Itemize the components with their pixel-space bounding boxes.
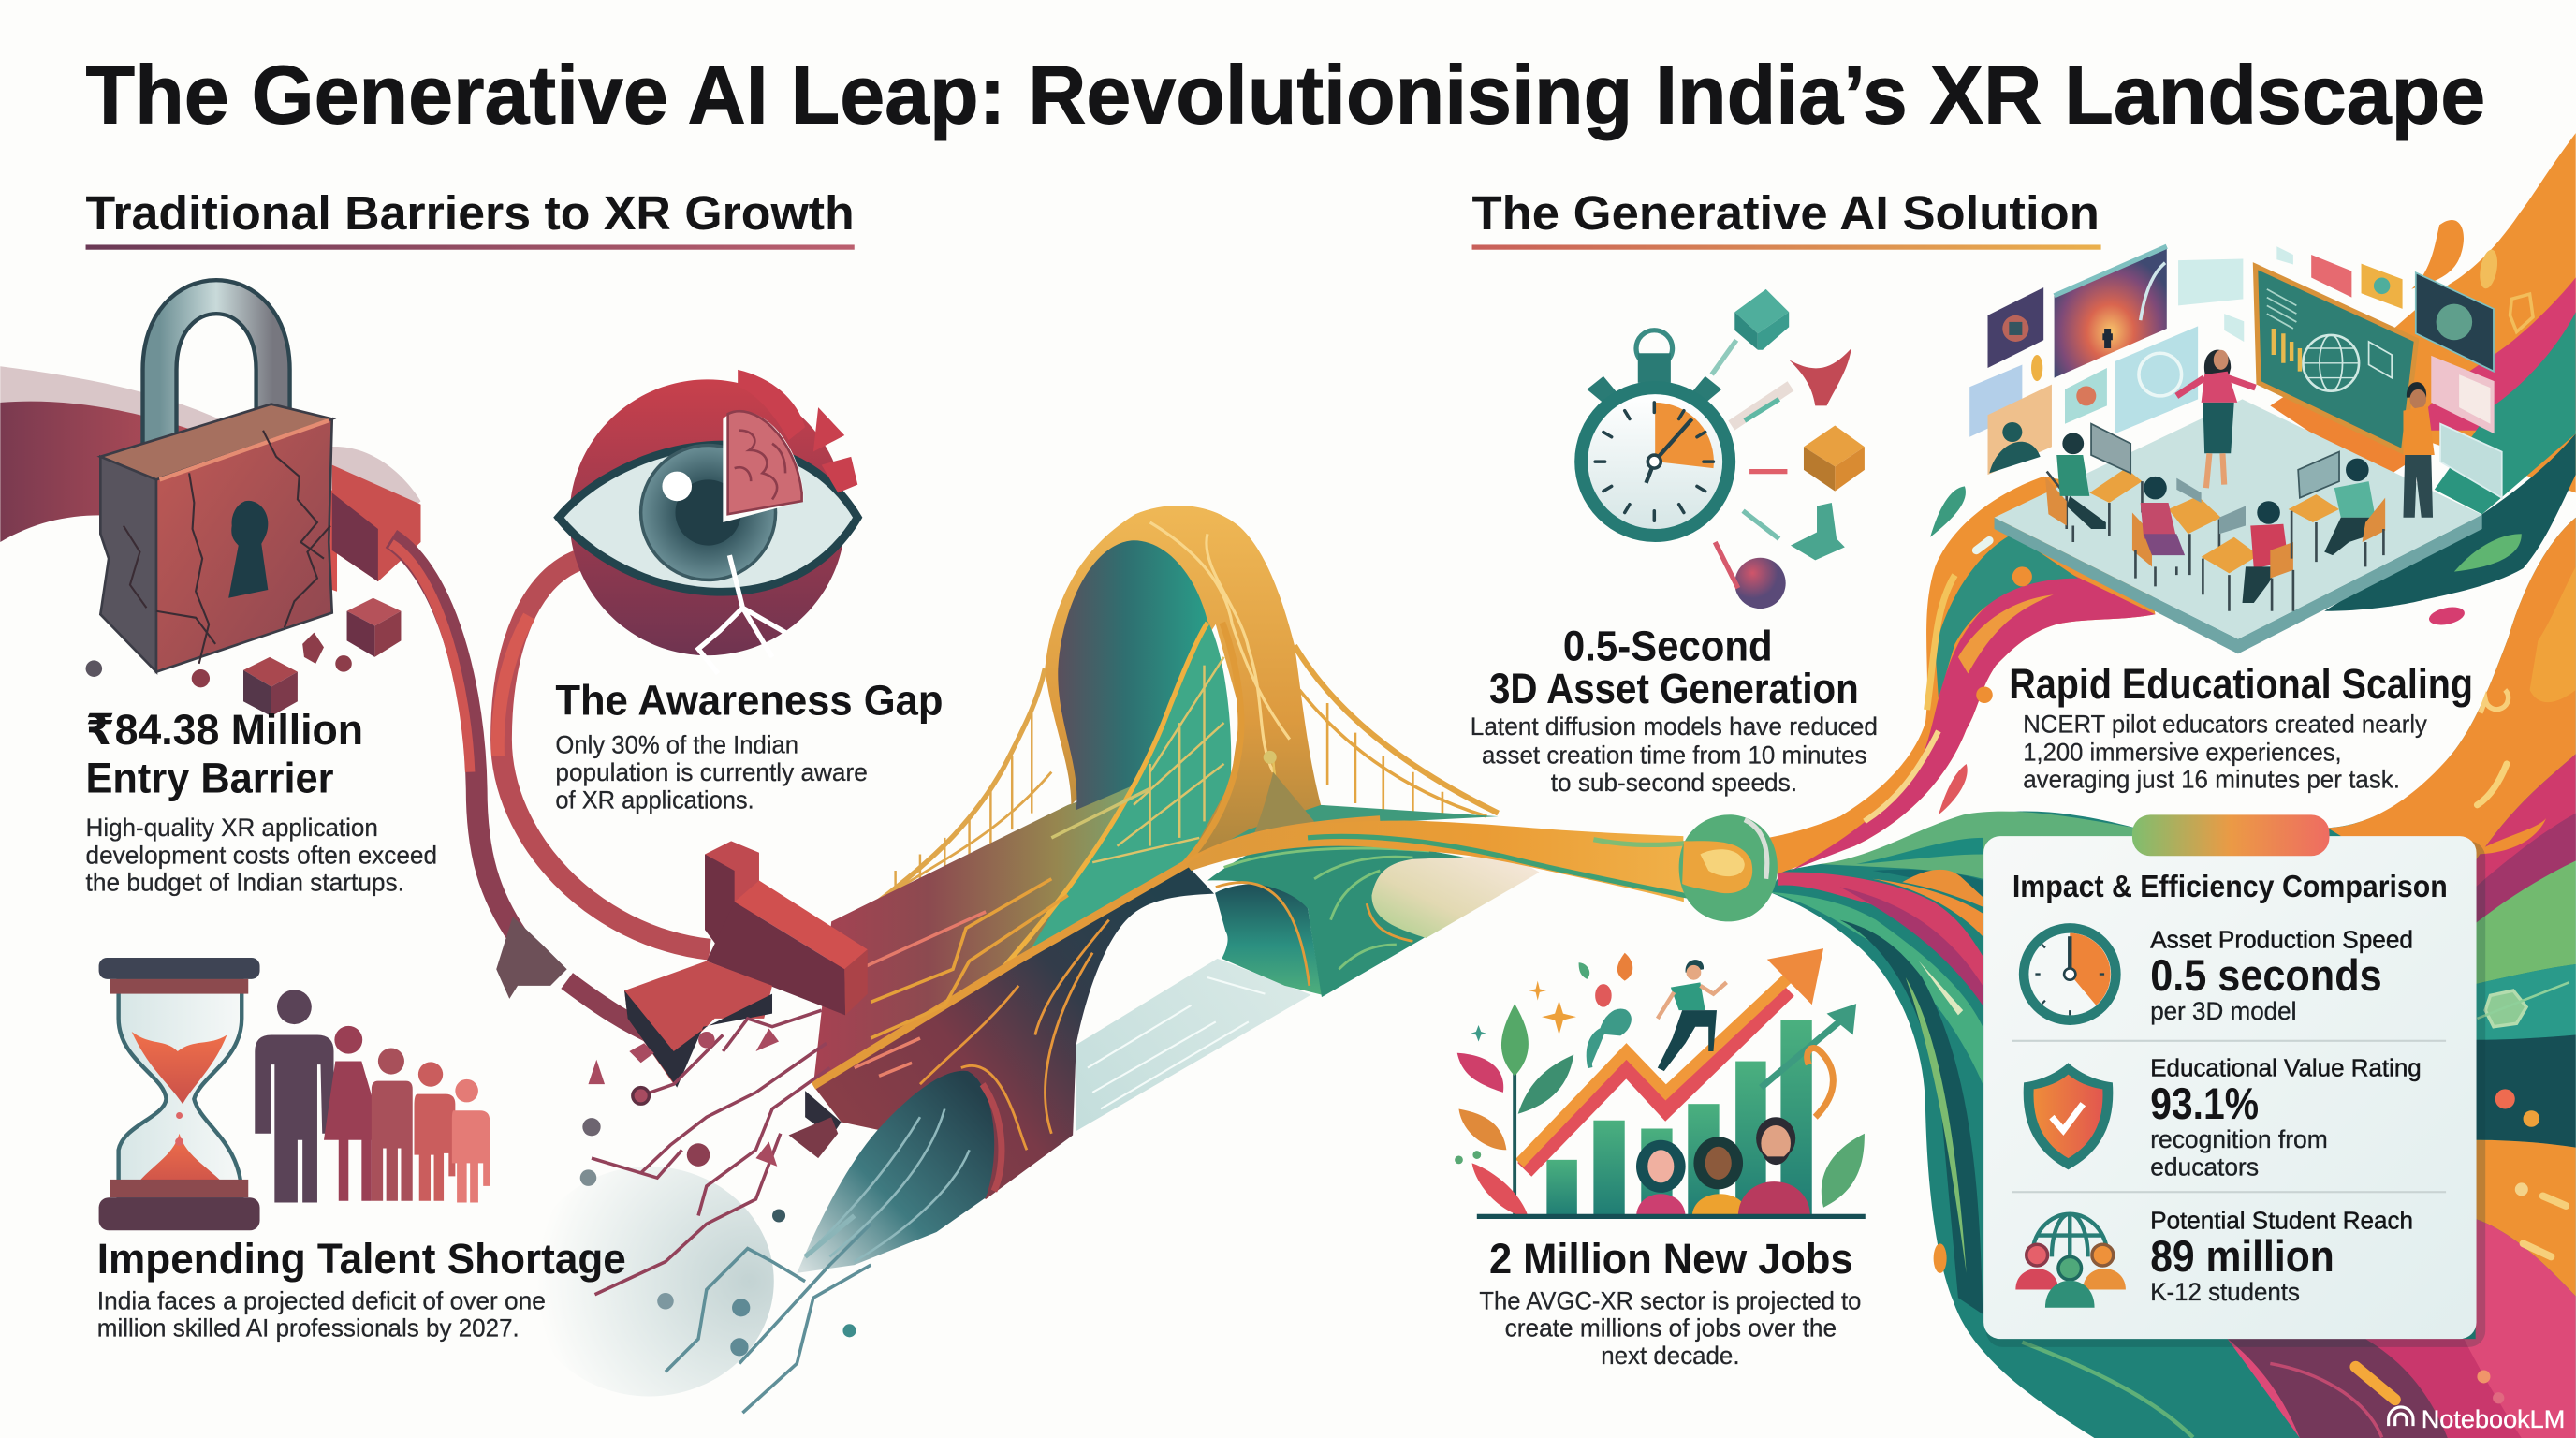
bridge: top-face circuits xyxy=(855,788,1150,1076)
text block: awareness gap: population is currently aware xyxy=(555,757,868,786)
bridge: veins xyxy=(920,920,1109,1150)
bridge: left railing xyxy=(863,668,1051,914)
chart: thin green arrow xyxy=(1761,1019,1843,1088)
icon: cracked eye with brain xyxy=(559,370,857,673)
right flowing ribbons xyxy=(1769,518,2576,1438)
bridge: arch xyxy=(1045,506,1321,864)
broken T block xyxy=(624,841,868,1158)
metric: educational value rating: educators xyxy=(2150,1152,2259,1181)
bridge: green body xyxy=(1208,829,1536,997)
left crimson ribbon and block xyxy=(0,366,421,592)
teacher xyxy=(2176,350,2256,488)
students and desks xyxy=(2045,424,2385,611)
text block: talent shortage: India faces a projected deficit of over one xyxy=(97,1286,546,1315)
bridge: deck to knot xyxy=(1186,820,1684,902)
bridge structure xyxy=(797,506,1692,1273)
circuit: red traces xyxy=(592,1010,829,1295)
metric: asset production speed: per 3D model xyxy=(2150,996,2296,1025)
metric: asset production speed: Asset Production Speed xyxy=(2150,925,2413,953)
platform xyxy=(1995,515,2482,653)
asset: teal cube xyxy=(1734,289,1789,350)
metric: asset production speed xyxy=(2019,923,2413,1025)
metric: potential student reach xyxy=(2015,1207,2413,1308)
metric: educational value rating: Educational Value Rating xyxy=(2150,1053,2422,1081)
shadow blob under circuits xyxy=(524,1167,774,1397)
student two xyxy=(2132,477,2221,586)
metric: potential student reach: K-12 students xyxy=(2150,1277,2300,1306)
bridge: right wall xyxy=(1215,884,1322,995)
text block: awareness gap xyxy=(555,676,944,814)
metric: educational value rating: 93.1% xyxy=(2150,1079,2259,1129)
text block: educational scaling: NCERT pilot educators created nearly xyxy=(2023,710,2427,739)
text block: new jobs: create millions of jobs over the xyxy=(1505,1313,1837,1343)
text block: educational scaling xyxy=(2009,660,2473,794)
student four xyxy=(2289,452,2385,566)
heading: traditional barriers: Traditional Barriers to XR Growth xyxy=(86,186,855,240)
text block: educational scaling: Rapid Educational Scaling xyxy=(2009,660,2473,708)
text block: talent shortage: million skilled AI professionals by 2027. xyxy=(97,1313,520,1343)
figure 4 xyxy=(414,1062,455,1201)
text block: entry barrier: Entry Barrier xyxy=(86,755,334,802)
student three xyxy=(2202,501,2293,611)
text block: educational scaling: averaging just 16 minutes per task. xyxy=(2023,765,2400,794)
floating panels xyxy=(1969,246,2502,498)
text block: educational scaling: 1,200 immersive experiences, xyxy=(2023,737,2342,766)
panel: impact and efficiency comparison xyxy=(1983,814,2485,1347)
NotebookLM watermark: NotebookLM xyxy=(2422,1404,2565,1433)
figure 3 xyxy=(372,1049,413,1201)
text block: 3D asset generation: to sub-second speeds. xyxy=(1551,768,1797,797)
text block: entry barrier: development costs often exceed xyxy=(86,840,437,869)
text block: new jobs: 2 Million New Jobs xyxy=(1489,1235,1853,1283)
chart: baseline xyxy=(1477,1214,1866,1219)
icon: cracked padlock xyxy=(86,297,401,716)
chalkboard xyxy=(2256,266,2416,452)
text block: 3D asset generation: 0.5-Second xyxy=(1563,622,1773,669)
text block: 3D asset generation xyxy=(1471,622,1878,797)
chart: three people xyxy=(1636,1117,1810,1217)
icon: stopwatch xyxy=(1574,330,1735,542)
heading: generative AI solution: The Generative AI Solution xyxy=(1472,186,2100,240)
metric: potential student reach: 89 million xyxy=(2150,1232,2334,1282)
floor accent behind board xyxy=(2270,386,2418,479)
bridge: pale opening xyxy=(1371,856,1539,938)
thin ribbons joining bridge xyxy=(391,539,710,1038)
icon: shrinking talent figures xyxy=(255,990,490,1202)
chart: plants xyxy=(1455,953,1865,1217)
figure 1 xyxy=(255,990,334,1202)
bridge: gold edge xyxy=(813,820,1380,1086)
chart: runner xyxy=(1658,960,1727,1071)
bridge: arch opening xyxy=(1058,540,1208,810)
growth chart xyxy=(1455,948,1866,1219)
circuit: teal traces xyxy=(666,1215,871,1413)
asset: red form xyxy=(1789,348,1852,405)
text block: talent shortage: Impending Talent Shortage xyxy=(97,1235,626,1283)
text block: entry barrier: ₹84.38 Million xyxy=(86,706,363,754)
text block: awareness gap: Only 30% of the Indian xyxy=(555,730,798,759)
bridge: right gold cables xyxy=(1295,646,1499,816)
bridge: tunnel xyxy=(797,1071,1002,1273)
bridge: green lattice xyxy=(1018,621,1231,969)
metric: asset production speed: 0.5 seconds xyxy=(2150,951,2382,1001)
upper ribbon stack behind classroom xyxy=(1741,133,2576,874)
bridge: deck top face xyxy=(813,764,1499,1086)
chart: rising arrow xyxy=(1519,973,1793,1169)
figure 5 xyxy=(452,1079,490,1202)
metric: educational value rating xyxy=(2024,1053,2422,1181)
text block: 3D asset generation: asset creation time from 10 minutes xyxy=(1482,741,1867,770)
text block: new jobs: The AVGC-XR sector is projected to xyxy=(1479,1286,1861,1315)
text block: entry barrier: the budget of Indian startups. xyxy=(86,868,404,897)
bridge: pier xyxy=(813,864,1214,1199)
title: The Generative AI Leap: Revolutionising India’s XR Landscape xyxy=(86,50,2485,141)
text block: new jobs xyxy=(1479,1235,1861,1370)
bridge: pale under-ribbon xyxy=(1076,959,1311,1131)
text block: entry barrier xyxy=(86,706,437,897)
metric: potential student reach: Potential Student Reach xyxy=(2150,1207,2413,1235)
text block: 3D asset generation: 3D Asset Generation xyxy=(1489,665,1859,712)
bridge: gold strands xyxy=(999,522,1314,973)
circuit traces dissolving xyxy=(580,1010,871,1413)
student one xyxy=(2045,424,2142,542)
text block: entry barrier: High-quality XR application xyxy=(86,813,378,842)
panel heading: Impact & Efficiency Comparison xyxy=(2012,870,2448,904)
text block: new jobs: next decade. xyxy=(1601,1341,1740,1370)
space panel xyxy=(2055,246,2167,378)
panel tab xyxy=(2132,814,2329,856)
icon: generated 3D assets xyxy=(1712,289,1865,609)
knot joint xyxy=(1679,814,1778,921)
asset: sphere xyxy=(1734,558,1786,609)
asset arrows xyxy=(1712,340,1791,588)
text block: talent shortage xyxy=(97,1235,626,1343)
text block: awareness gap: of XR applications. xyxy=(555,785,754,814)
text block: awareness gap: The Awareness Gap xyxy=(555,676,944,724)
metric: educational value rating: recognition from xyxy=(2150,1124,2328,1153)
asset: green block xyxy=(1791,503,1845,560)
text block: 3D asset generation: Latent diffusion models have reduced xyxy=(1471,712,1878,741)
figure 2 xyxy=(324,1026,385,1201)
classroom scene xyxy=(1969,246,2502,653)
asset: orange crate xyxy=(1804,425,1865,492)
icon: hourglass xyxy=(99,958,260,1230)
instructor xyxy=(2403,382,2435,518)
